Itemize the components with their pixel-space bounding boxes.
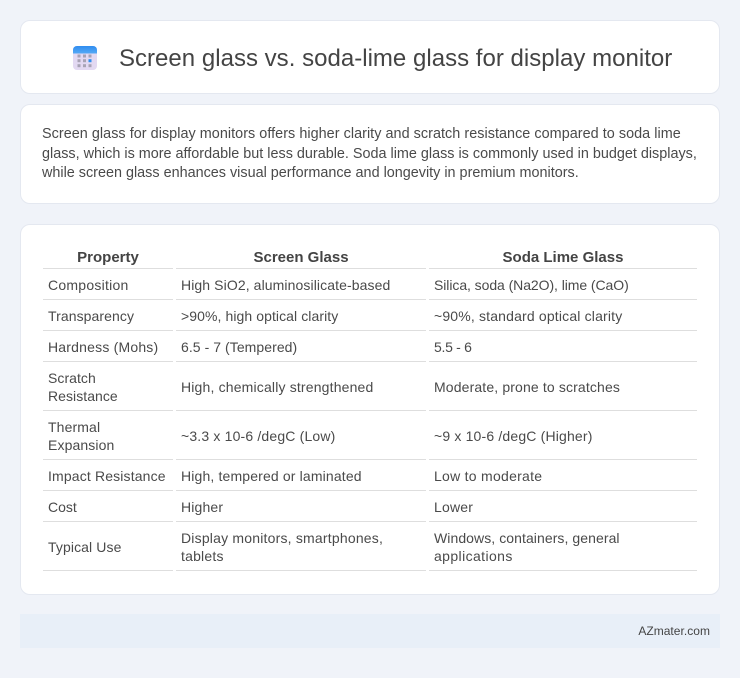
row: scratch resistance [48, 370, 620, 404]
row: impact resistance: Low to moderate [434, 468, 542, 484]
table header: Soda Lime Glass [503, 249, 623, 266]
row: impact resistance: Impact Resistance [48, 468, 166, 484]
table header: Screen Glass [253, 249, 349, 266]
table header: Property [77, 249, 139, 266]
row: hardness: 6.5 - 7 (Tempered) [181, 339, 297, 355]
footer credit: AZmater.com [638, 624, 710, 638]
intro text [42, 126, 697, 181]
row: typical use: Windows, containers, general [434, 530, 620, 546]
row: scratch resistance: Scratch [48, 370, 96, 386]
row: transparency [48, 308, 622, 324]
row: cost: Higher [181, 499, 223, 515]
panel: title card [20, 20, 720, 94]
row: cost: Cost [48, 499, 77, 515]
icon: calendar [73, 46, 97, 70]
intro text: glass, which is more affordable but less durable. Soda lime glass is commonly used in budget displays, [42, 146, 697, 162]
footer bar [20, 614, 720, 648]
row: typical use: Typical Use [48, 539, 121, 555]
row: hardness: Hardness (Mohs) [48, 339, 158, 355]
row: hardness [48, 339, 472, 355]
row: thermal expansion: ~3.3 x 10-6 /degC (Low) [181, 428, 336, 444]
row: hardness: 5.5 - 6 [434, 339, 472, 355]
row: typical use: Display monitors, smartphones, [181, 530, 383, 546]
row: impact resistance: High, tempered or laminated [181, 468, 362, 484]
row: cost [48, 499, 473, 515]
table header [77, 249, 623, 266]
row: composition [48, 277, 629, 293]
row: scratch resistance: High, chemically strengthened [181, 379, 373, 395]
row: typical use: applications [434, 548, 513, 564]
row: cost: Lower [434, 499, 473, 515]
row: composition: Silica, soda (Na2O), lime (CaO) [434, 277, 629, 293]
intro text: Screen glass for display monitors offers higher clarity and scratch resistance compared to soda lime [42, 126, 681, 142]
row: transparency: ~90%, standard optical clarity [434, 308, 622, 324]
title: Screen glass vs. soda-lime glass for display monitor [119, 45, 672, 72]
row: transparency: >90%, high optical clarity [181, 308, 338, 324]
panel: introduction [20, 104, 720, 204]
row: thermal expansion: Expansion [48, 437, 114, 453]
panel: comparison table [20, 224, 720, 595]
row: typical use: tablets [181, 548, 224, 564]
row: impact resistance [48, 468, 542, 484]
row: thermal expansion: ~9 x 10-6 /degC (Higher) [434, 428, 593, 444]
row: transparency: Transparency [48, 308, 134, 324]
row: thermal expansion: Thermal [48, 419, 100, 435]
intro text: while screen glass enhances visual performance and longevity in premium monitors. [42, 165, 579, 181]
row: composition: Composition [48, 277, 129, 293]
row: thermal expansion [48, 419, 593, 453]
row: scratch resistance: Resistance [48, 388, 118, 404]
row: typical use [48, 530, 620, 564]
row: scratch resistance: Moderate, prone to scratches [434, 379, 620, 395]
row: composition: High SiO2, aluminosilicate-based [181, 277, 390, 293]
